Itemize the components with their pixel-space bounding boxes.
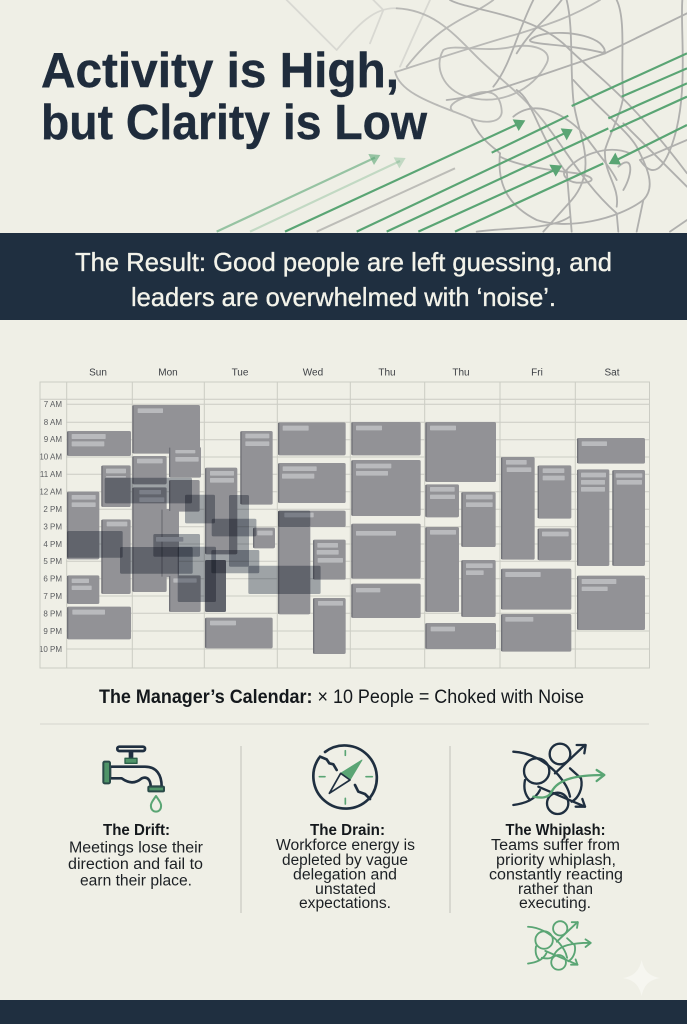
right-side calendar blocks: Thursday to Saturday xyxy=(351,422,645,652)
time labels: 9 AM xyxy=(44,435,62,444)
day headers: Thu xyxy=(452,368,470,378)
meeting title placeholders xyxy=(72,408,343,625)
Monday meetings xyxy=(132,405,201,612)
heading and text: The Drain: The Drain: xyxy=(310,822,385,839)
heading and text: The Whiplash: executing. xyxy=(519,895,591,912)
heading and text: The Drain: depleted by vague xyxy=(282,852,408,869)
second Thursday meetings xyxy=(425,422,496,649)
time labels: 7 PM xyxy=(43,592,62,601)
time labels: 7 AM xyxy=(44,400,62,409)
illustration: tangled lines and green arrows xyxy=(217,0,687,232)
heading and text: The Drain xyxy=(276,822,415,912)
banner text: The Result: Good people are left guessing, and xyxy=(75,247,612,277)
icon: broken compass xyxy=(313,745,377,809)
rising arrows xyxy=(217,53,687,232)
day headers: Thu xyxy=(378,368,396,378)
Friday meetings xyxy=(501,457,571,652)
title: Activity is High, xyxy=(41,44,399,98)
Thursday meetings xyxy=(351,422,421,618)
time labels: 9 PM xyxy=(43,627,62,636)
heading and text: The Drain: expectations. xyxy=(299,895,391,912)
day headers: Sun xyxy=(89,368,107,378)
heading and text: The Drift: Meetings lose their xyxy=(69,840,203,856)
Sunday meetings xyxy=(67,431,131,639)
day headers xyxy=(89,368,620,378)
title xyxy=(41,44,428,150)
heading and text: The Drain: unstated xyxy=(315,881,376,898)
Tuesday meetings xyxy=(205,431,275,648)
day headers: Fri xyxy=(531,368,543,378)
Saturday meetings xyxy=(577,438,645,630)
result banner xyxy=(0,233,687,320)
icon: dripping faucet xyxy=(103,747,164,812)
time labels: 3 PM xyxy=(43,522,62,532)
time labels: 11 AM xyxy=(40,470,62,479)
icon: sparkle watermark xyxy=(623,960,660,996)
calendar xyxy=(39,368,650,668)
left-side calendar blocks: Sunday to Wednesday xyxy=(67,405,346,654)
heading and text: The Drain: Workforce energy is xyxy=(276,837,415,854)
heading and text: The Whiplash: The Whiplash: xyxy=(506,822,606,839)
time labels: 6 PM xyxy=(43,574,62,584)
time labels xyxy=(39,400,62,654)
day headers: Tue xyxy=(232,368,249,378)
overlapping conflicting meetings xyxy=(67,478,321,612)
banner text: leaders are overwhelmed with ‘noise’. xyxy=(131,282,556,312)
heading and text: The Whiplash: priority whiplash, xyxy=(496,852,616,869)
time labels: 2 PM xyxy=(43,505,62,514)
day headers: Sat xyxy=(604,368,620,378)
heading and text: The Whiplash: constantly reacting xyxy=(489,866,623,884)
meeting title placeholders xyxy=(356,426,642,631)
time labels: 8 AM xyxy=(44,418,62,427)
calendar grid xyxy=(40,382,650,668)
title: but Clarity is Low xyxy=(41,96,428,150)
heading and text: The Whiplash xyxy=(489,822,623,912)
heading and text: The Drift: earn their place. xyxy=(80,872,192,890)
icon: tangled knot with arrows xyxy=(513,744,604,814)
day headers: Mon xyxy=(158,368,178,378)
day headers: Wed xyxy=(303,368,323,378)
heading and text: The Drain: delegation and xyxy=(293,866,397,884)
time labels: 10 PM xyxy=(39,645,62,654)
column: The Drain xyxy=(276,745,415,912)
footer band xyxy=(0,1000,687,1024)
heading and text: The Drift xyxy=(68,822,203,890)
heading and text: The Drift: The Drift: xyxy=(103,822,170,839)
heading and text: The Drift: direction and fail to xyxy=(68,856,203,873)
Wednesday meetings xyxy=(278,422,346,654)
time labels: 8 PM xyxy=(43,610,62,618)
column: The Drift xyxy=(68,747,203,890)
heading and text: The Whiplash: Teams suffer from xyxy=(491,837,620,854)
tangled grey scribble xyxy=(287,0,687,232)
column: The Whiplash xyxy=(489,744,623,970)
time labels: 4 PM xyxy=(43,540,62,549)
time labels: 10 AM xyxy=(39,452,62,462)
time labels: 5 PM xyxy=(43,557,62,566)
heading and text: The Whiplash: rather than xyxy=(518,881,593,898)
time labels: 12 AM xyxy=(39,488,62,496)
calendar caption: The Manager’s Calendar: × 10 People = Choked with Noise xyxy=(99,687,584,708)
banner text xyxy=(75,247,612,312)
icon: small green knot xyxy=(528,921,591,970)
